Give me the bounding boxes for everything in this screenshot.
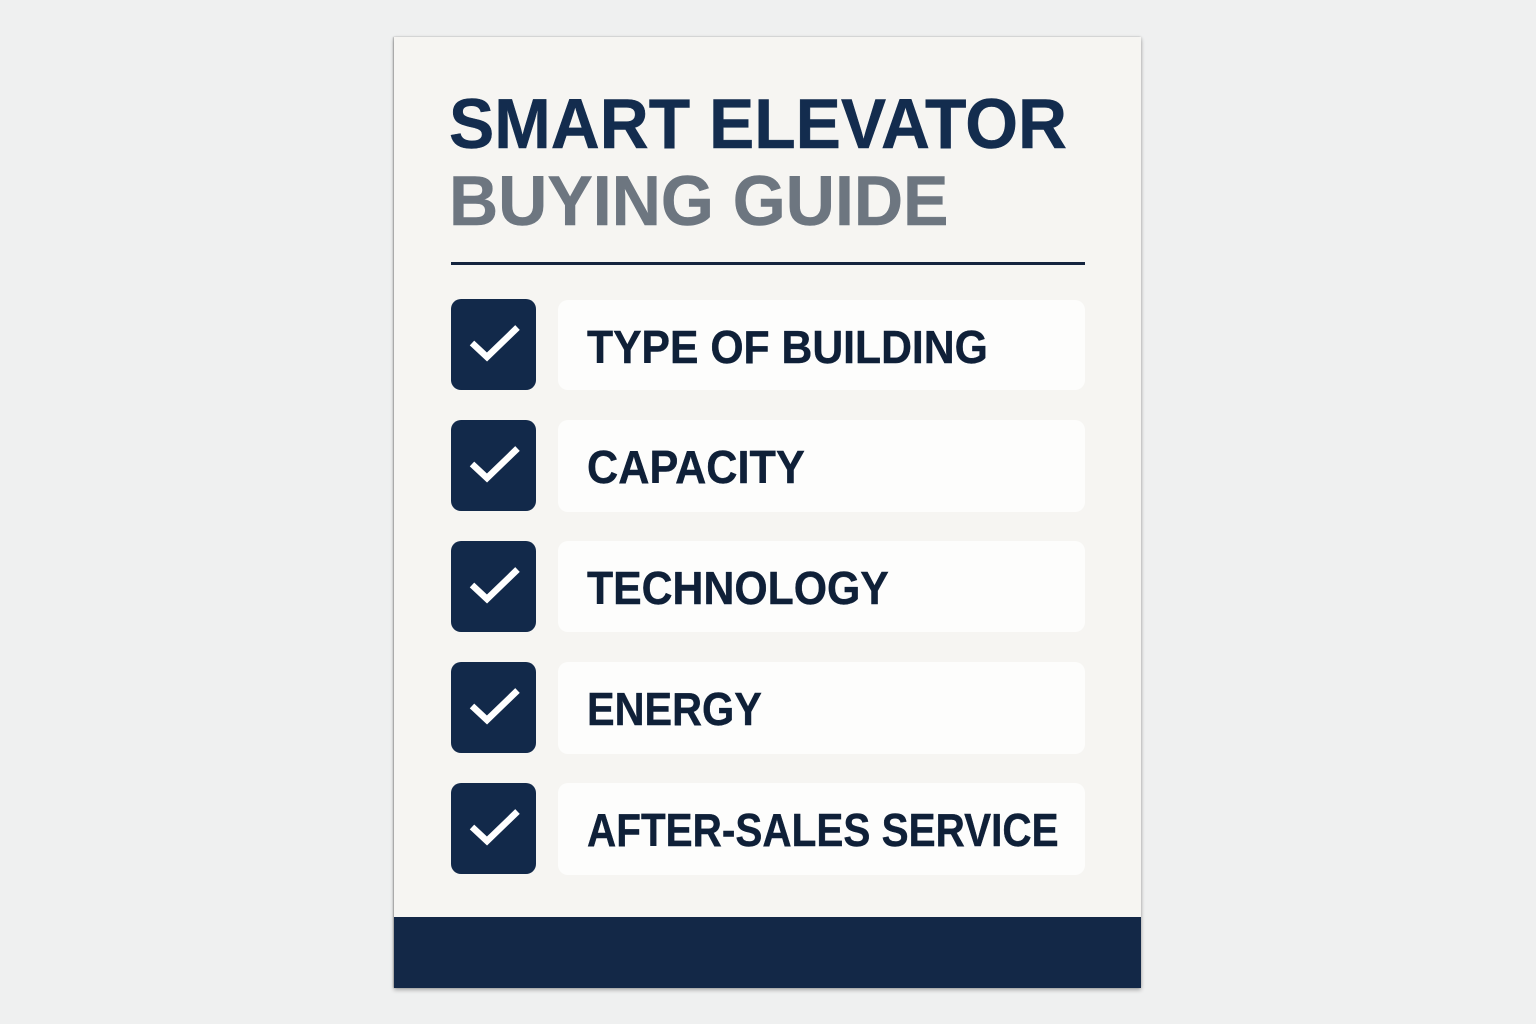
checkbox icon: after-sales service [451, 783, 536, 874]
checkbox icon: technology [451, 541, 536, 632]
title: SMART ELEVATOR [448, 84, 1066, 163]
item: energy [558, 662, 1085, 754]
item: technology [558, 541, 1085, 632]
item: capacity: CAPACITY [587, 440, 805, 492]
poster panel [394, 37, 1141, 988]
item: capacity [558, 420, 1085, 512]
item: energy: ENERGY [587, 682, 762, 734]
item: after-sales service [558, 783, 1085, 875]
subtitle: BUYING GUIDE [448, 161, 948, 240]
item: type of building: TYPE OF BUILDING [587, 320, 988, 372]
item: type of building [558, 300, 1085, 390]
item: technology: TECHNOLOGY [587, 562, 889, 614]
item: after-sales service: AFTER-SALES SERVICE [587, 804, 1059, 856]
divider [451, 262, 1085, 264]
footer band [394, 917, 1141, 988]
checkbox icon: capacity [451, 420, 536, 511]
checkbox icon: energy [451, 662, 536, 753]
checkbox icon: type of building [451, 299, 536, 390]
